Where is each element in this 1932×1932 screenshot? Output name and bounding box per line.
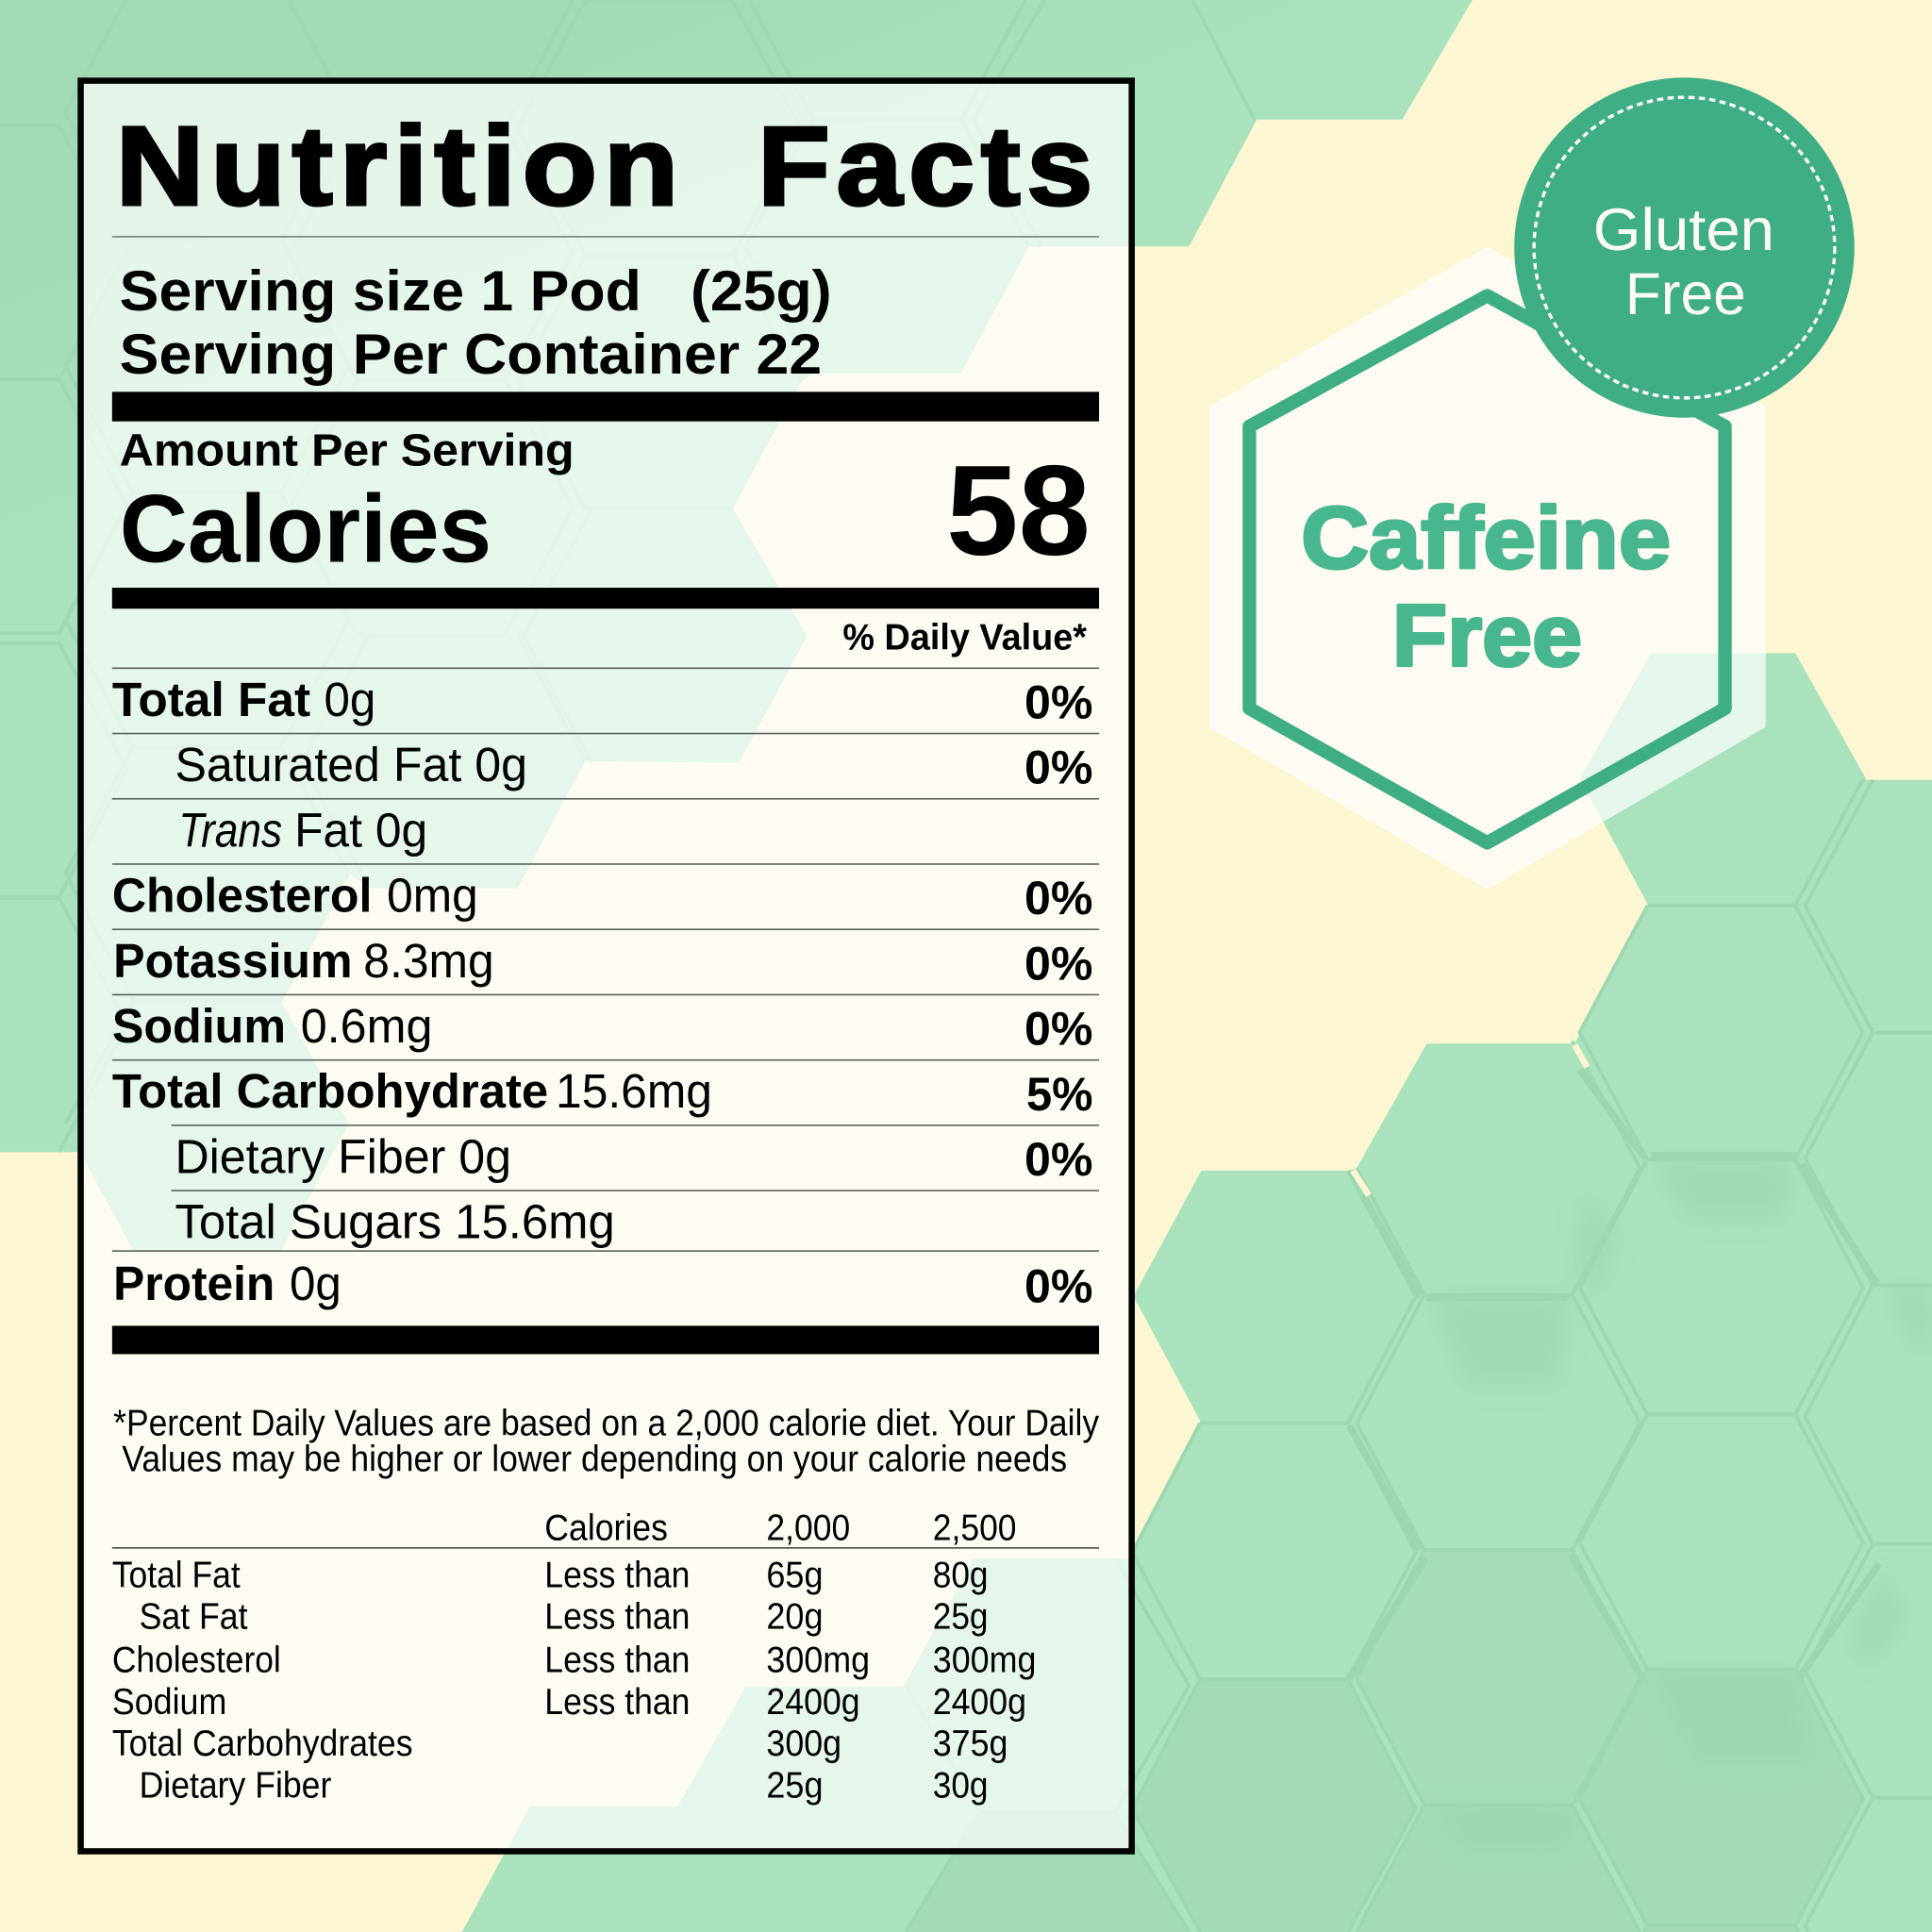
calories value: 58 xyxy=(946,439,1091,582)
title: Nutrition xyxy=(116,104,685,229)
table row: sat fat: 20g xyxy=(766,1597,823,1638)
daily values table xyxy=(112,1508,1099,1807)
row: total carbohydrate: 15.6mg xyxy=(556,1064,712,1118)
tile edges xyxy=(906,778,1932,1932)
thick bar xyxy=(112,1325,1099,1354)
row: sodium xyxy=(112,999,1093,1056)
row: protein: Protein xyxy=(113,1257,275,1310)
hexagon tiles: top left cluster xyxy=(0,0,1473,1251)
table row: cholesterol: 300mg xyxy=(766,1640,870,1680)
gluten free seal xyxy=(1514,77,1855,418)
table row: sodium: Sodium xyxy=(112,1682,226,1723)
thick bar xyxy=(112,588,1099,608)
panel background and border xyxy=(81,81,1132,1851)
title xyxy=(116,104,1099,229)
row: total carbohydrate: Total Carbohydrate xyxy=(112,1064,548,1118)
row: protein: 0g xyxy=(290,1257,341,1310)
table row: sat fat xyxy=(140,1597,989,1638)
row: potassium: 0% xyxy=(1024,937,1093,990)
row: total carbohydrate xyxy=(112,1064,1093,1121)
table row: dietary fiber: 25g xyxy=(766,1766,823,1807)
row: saturated fat: 0% xyxy=(1024,741,1093,794)
row dividers xyxy=(112,668,1099,1252)
table row: total carbohydrates: 375g xyxy=(933,1724,1008,1764)
nutrient rows xyxy=(112,673,1093,1313)
table row: total fat: Less than xyxy=(544,1555,690,1595)
table row: sat fat: 25g xyxy=(933,1597,989,1638)
row: sodium: Sodium xyxy=(112,999,286,1053)
table row: sodium: Less than xyxy=(544,1682,690,1723)
soft tile shadows xyxy=(1429,1160,1932,1848)
table row: total fat: 65g xyxy=(766,1555,823,1595)
row: saturated fat: Saturated Fat 0g xyxy=(175,738,527,791)
table header: 2,500 xyxy=(933,1508,1017,1549)
row: sodium: 0.6mg xyxy=(301,999,432,1053)
table row: cholesterol xyxy=(112,1640,1036,1680)
seal text: Gluten xyxy=(1593,197,1774,263)
table row: total carbohydrates xyxy=(112,1724,1008,1764)
footnote: Values may be higher or lower depending on your calorie needs xyxy=(122,1440,1067,1480)
row: protein xyxy=(113,1257,1093,1313)
calories label: Calories xyxy=(120,475,491,583)
hexagon tiles: lower right cluster xyxy=(462,653,1932,1932)
table row: sat fat: Sat Fat xyxy=(140,1597,248,1638)
divider under title xyxy=(112,236,1099,238)
row: cholesterol: 0mg xyxy=(387,869,478,923)
row: saturated fat xyxy=(175,738,1093,794)
row: cholesterol: 0% xyxy=(1024,872,1093,924)
table row: sodium: 2400g xyxy=(766,1682,860,1723)
table row: total fat: Total Fat xyxy=(112,1555,241,1595)
serving information xyxy=(120,259,832,386)
serving information: Serving Per Container 22 xyxy=(120,323,822,386)
table row: cholesterol: Cholesterol xyxy=(112,1640,281,1680)
row: dietary fiber xyxy=(175,1129,1093,1186)
nutrition facts panel xyxy=(81,81,1132,1851)
footnote: *Percent Daily Values are based on a 2,000 calorie diet. Your Daily xyxy=(113,1404,1099,1444)
row: sodium: 0% xyxy=(1024,1003,1093,1056)
table row: dietary fiber: Dietary Fiber xyxy=(140,1766,331,1807)
row: total carbohydrate: 5% xyxy=(1026,1068,1093,1121)
badge text: Caffeine xyxy=(1301,489,1671,587)
badge inner outline xyxy=(1249,295,1725,842)
serving information: Serving size 1 Pod (25g) xyxy=(120,259,832,323)
table header: 2,000 xyxy=(766,1508,850,1549)
badge text: Free xyxy=(1392,586,1582,684)
row: dietary fiber: 0% xyxy=(1024,1133,1093,1186)
caffeine free badge xyxy=(1208,246,1766,890)
table row: sat fat: Less than xyxy=(544,1597,690,1638)
darker tile edges xyxy=(1349,1070,1879,1678)
row: potassium xyxy=(113,934,1093,990)
row: potassium: 8.3mg xyxy=(363,934,494,988)
table row: total fat: 80g xyxy=(933,1555,989,1595)
table row: dietary fiber: 30g xyxy=(933,1766,989,1807)
table row: total carbohydrates: 300g xyxy=(766,1724,841,1764)
row: trans fat: Trans xyxy=(178,803,282,857)
footnote xyxy=(113,1404,1099,1480)
table row: cholesterol: Less than xyxy=(544,1640,690,1680)
table row: dietary fiber xyxy=(140,1766,989,1807)
seal text: Free xyxy=(1625,261,1746,327)
seal circle xyxy=(1514,77,1855,418)
row: total fat: 0g xyxy=(325,673,375,726)
row: total sugars: Total Sugars 15.6mg xyxy=(175,1195,615,1249)
row: total fat: Total Fat xyxy=(112,673,310,726)
row: dietary fiber: Dietary Fiber 0g xyxy=(175,1129,511,1183)
daily value heading: % Daily Value* xyxy=(842,617,1087,658)
cream gaps between tiles xyxy=(1353,1045,1587,1195)
table row: total carbohydrates: Total Carbohydrates xyxy=(112,1724,413,1764)
row: potassium: Potassium xyxy=(113,934,353,988)
table row: total fat xyxy=(112,1555,989,1595)
badge text xyxy=(1301,489,1671,684)
row: cholesterol: Cholesterol xyxy=(112,869,372,923)
seal dashed ring xyxy=(1534,97,1835,398)
row: cholesterol xyxy=(112,869,1093,924)
row: trans fat xyxy=(178,803,427,857)
amount per serving: Amount Per Serving xyxy=(120,425,575,476)
row: total fat xyxy=(112,673,1093,728)
row: protein: 0% xyxy=(1024,1260,1093,1313)
row: trans fat: Fat 0g xyxy=(294,803,427,857)
table row: sodium xyxy=(112,1682,1026,1723)
table row: sodium: 2400g xyxy=(933,1682,1026,1723)
title: Facts xyxy=(758,104,1099,229)
seal text xyxy=(1593,197,1774,327)
thick bar xyxy=(112,391,1099,422)
table header xyxy=(544,1508,1017,1549)
badge outer hexagon xyxy=(1208,246,1766,890)
table row: cholesterol: 300mg xyxy=(933,1640,1036,1680)
table header: Calories xyxy=(544,1508,668,1549)
row: total fat: 0% xyxy=(1024,675,1093,728)
darker lower tiles xyxy=(906,1550,1863,1932)
